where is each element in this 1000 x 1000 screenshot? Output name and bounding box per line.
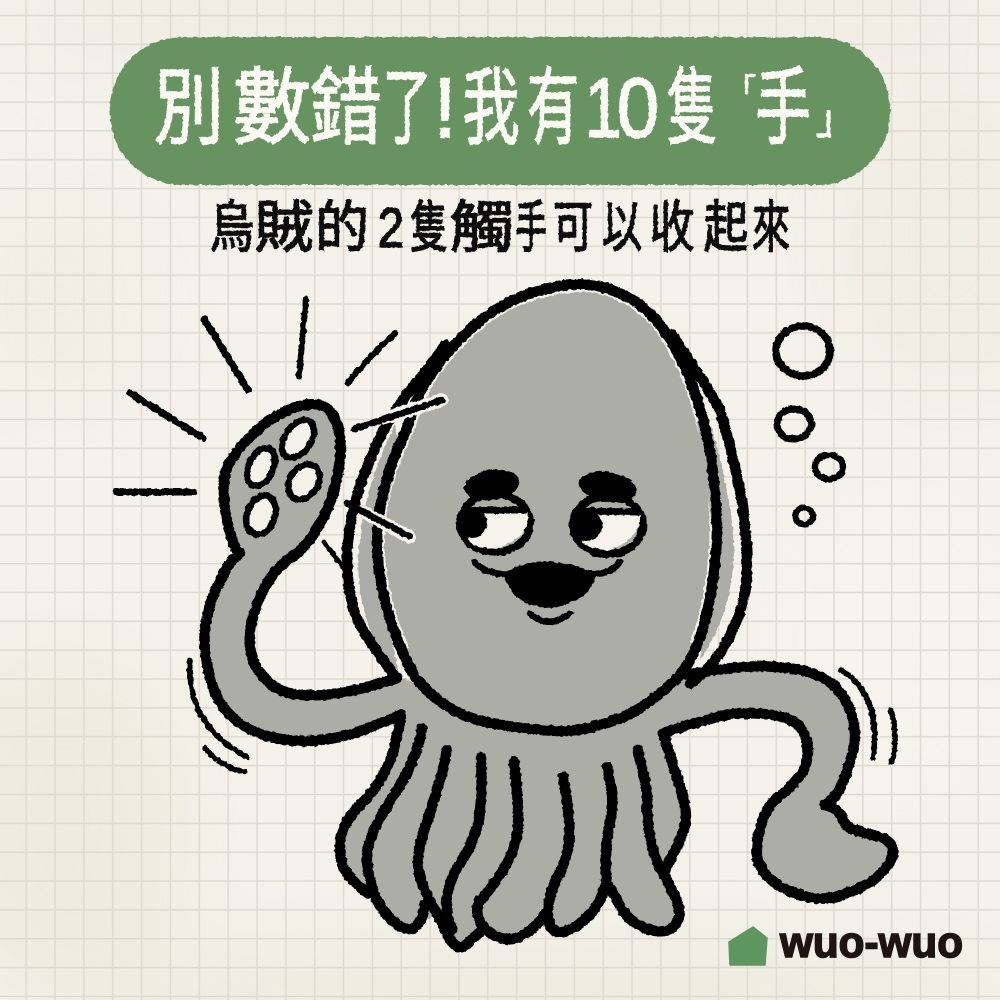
title: 錯 (310, 61, 382, 155)
title: 了 (383, 61, 431, 155)
subtitle: 以 (602, 196, 642, 259)
title: 「 (726, 74, 756, 107)
raised arm and hand (224, 404, 397, 695)
bubbles (776, 326, 843, 524)
left fin (347, 345, 445, 672)
mouth (475, 561, 620, 622)
subtitle: 觸 (450, 196, 514, 259)
title: 別 (154, 61, 224, 155)
right fin (672, 335, 747, 684)
title: 0 (617, 61, 659, 155)
title banner (110, 37, 890, 185)
squid outlines (204, 284, 893, 947)
title: 我 (462, 61, 520, 155)
title: 隻 (667, 61, 717, 155)
squid paper halo (377, 284, 717, 651)
subtitle: 可 (553, 196, 593, 259)
subtitle: 隻 (410, 196, 448, 259)
squid illustration (116, 284, 895, 950)
left eye (457, 466, 530, 552)
right arm (686, 666, 855, 805)
subtitle: 2 (378, 196, 404, 259)
title: 有 (527, 61, 579, 155)
logo (729, 918, 963, 967)
subtitle: 來 (752, 196, 790, 259)
title: 數 (233, 61, 311, 155)
suckers (241, 414, 326, 539)
subtitle: 收 (650, 196, 694, 259)
right eye (570, 467, 643, 554)
title: ! (433, 61, 457, 155)
logo wordmark: wuo-wuo (779, 918, 963, 967)
wiggle marks (190, 660, 895, 772)
subtitle: 起 (704, 196, 748, 259)
head outline (377, 284, 717, 731)
subtitle: 賊 (255, 196, 313, 259)
motion rays around hand (116, 299, 442, 566)
squid gray fills (205, 284, 893, 950)
squid fin fills (358, 370, 734, 680)
icon: house (729, 927, 767, 965)
subtitle: 的 (315, 196, 369, 259)
title: 1 (584, 61, 622, 155)
title: 手 (755, 61, 811, 155)
face (457, 466, 643, 622)
title: 」 (816, 98, 856, 142)
subtitle: 手 (515, 196, 547, 259)
subtitle: 烏 (209, 196, 254, 259)
tentacles (663, 733, 686, 873)
